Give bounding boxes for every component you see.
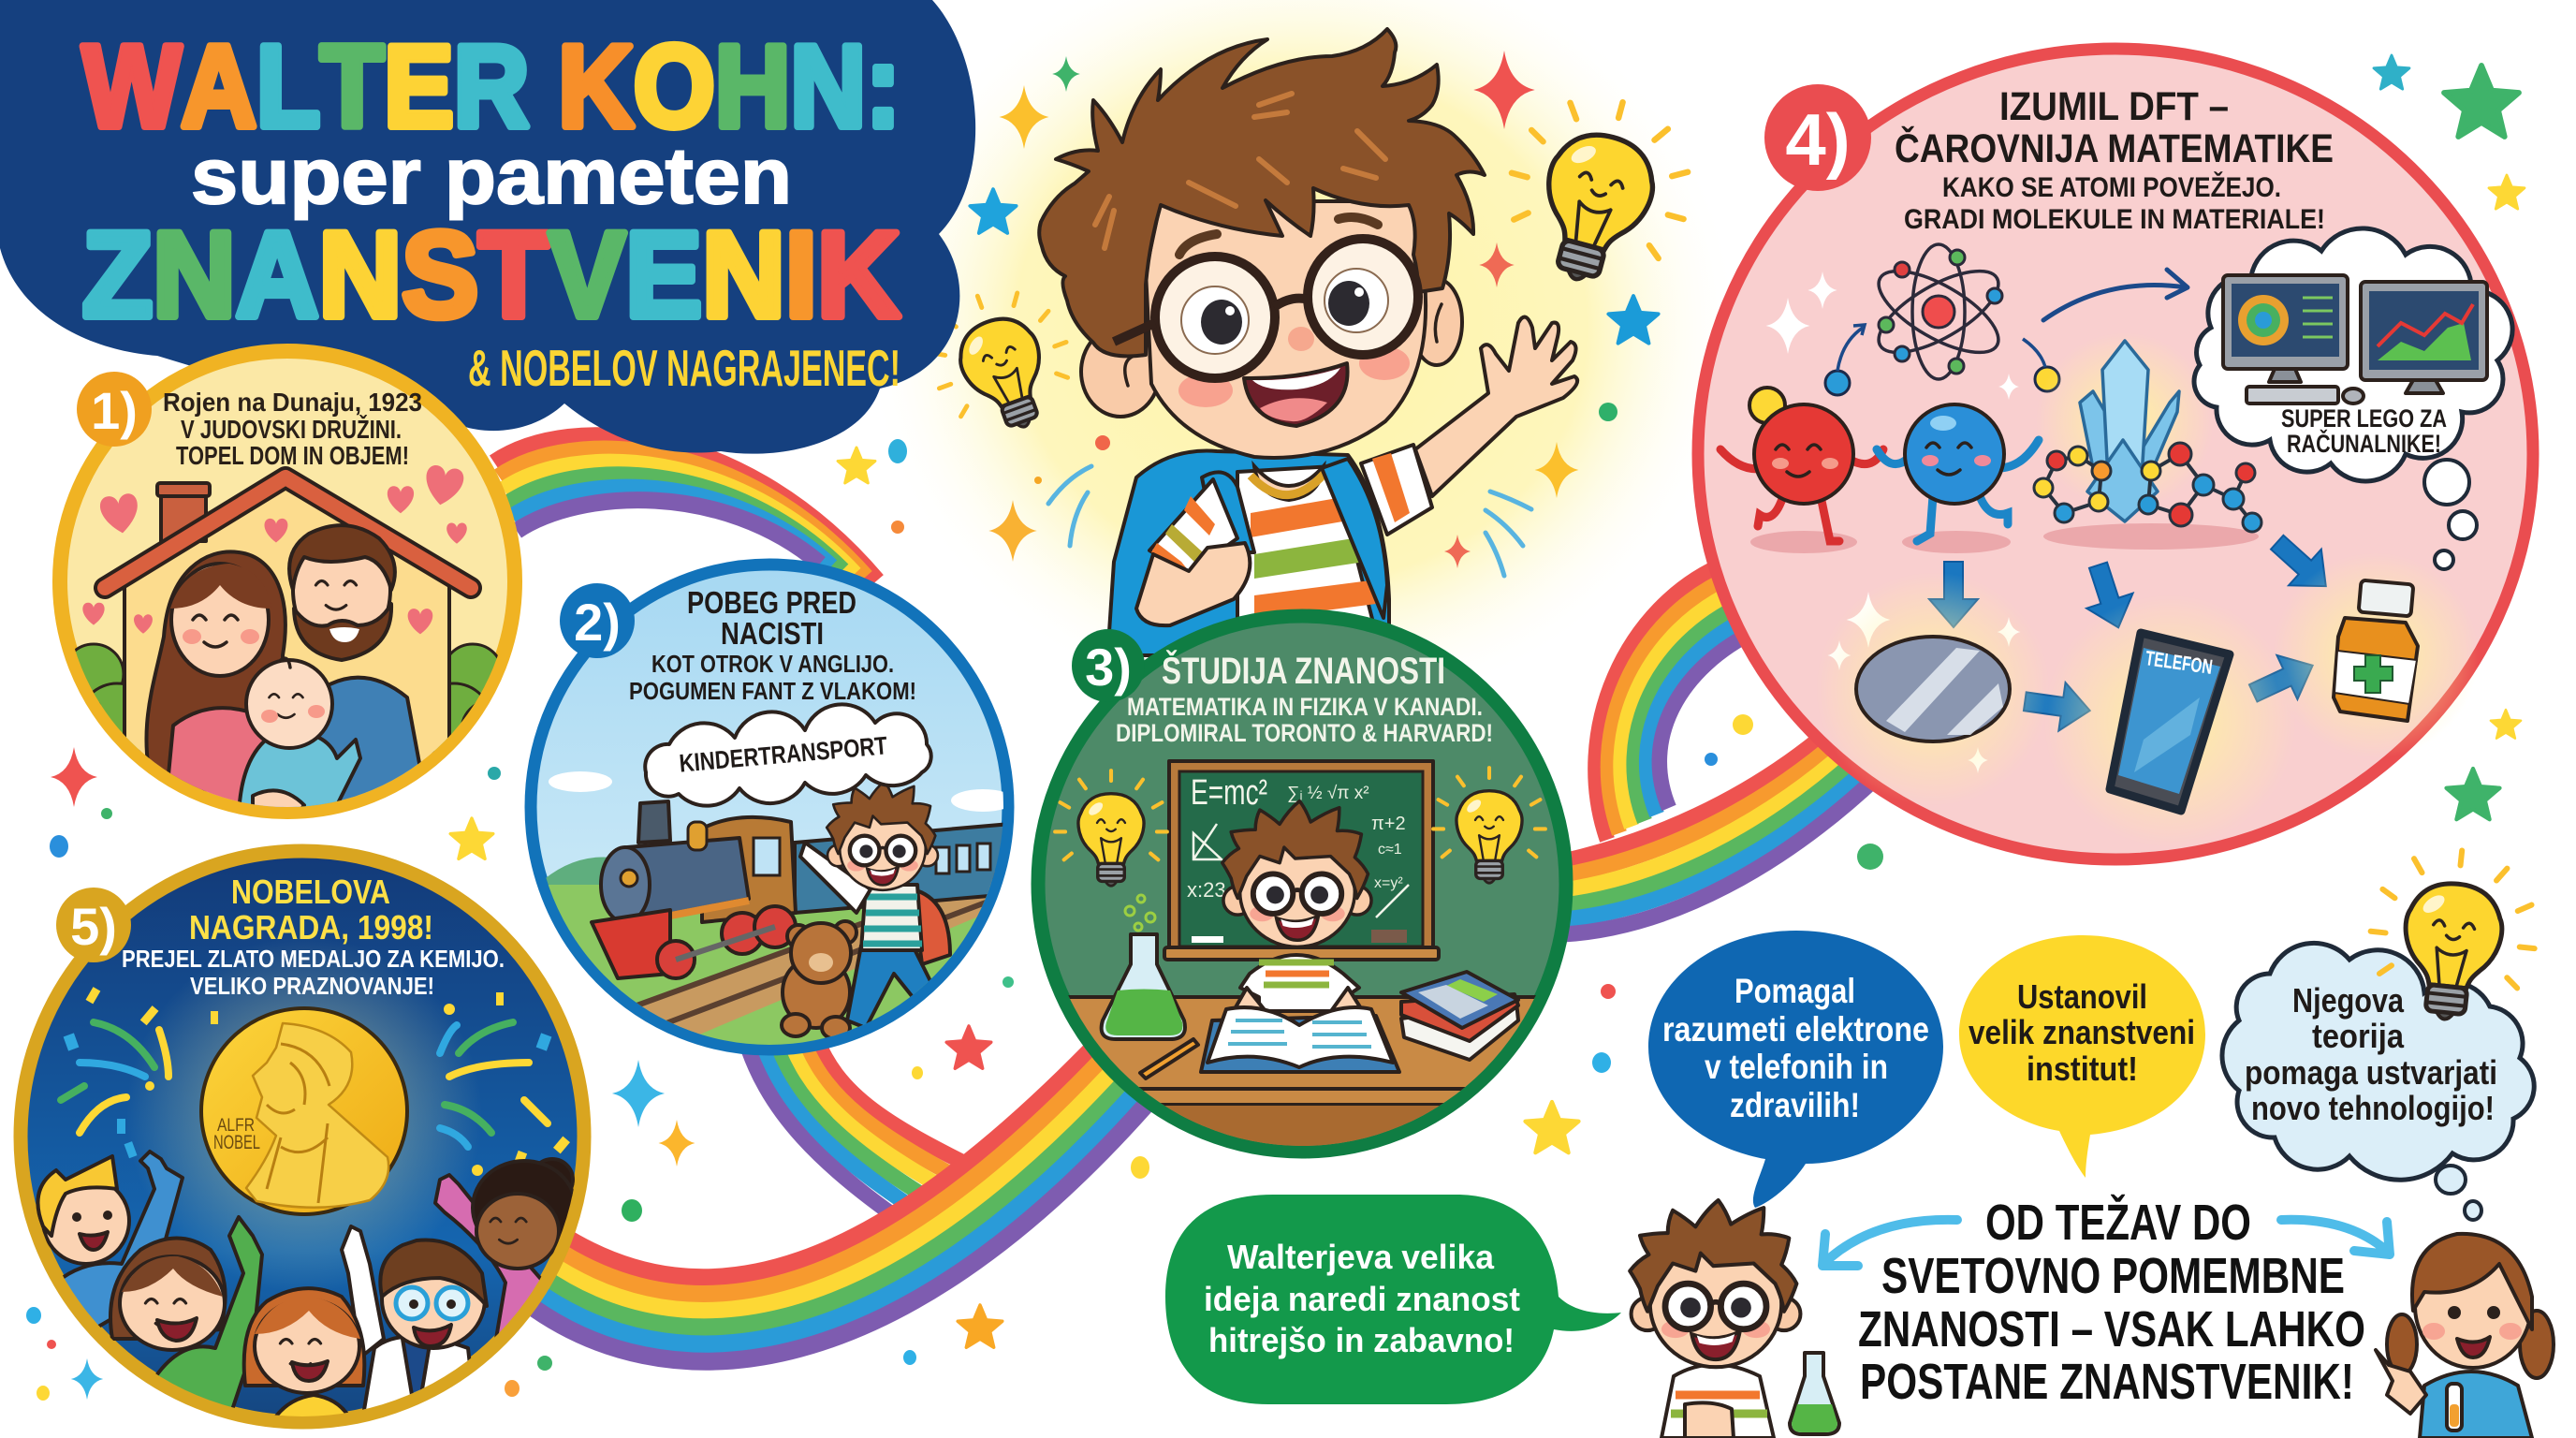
text block 4: ČAROVNIJA MATEMATIKE: [1895, 125, 2334, 171]
left monitor: [2223, 275, 2364, 404]
speech bubble: blue: zdravilih!: [1730, 1086, 1860, 1124]
cloud: Kindertransport label: KINDERTRANSPORT: [678, 731, 889, 778]
icon: lightbulb left: [915, 273, 1089, 449]
pencil: [1140, 1039, 1198, 1078]
rainbow: study to panel 4: [1563, 730, 1877, 934]
text block 4: KAKO SE ATOMI POVEŽEJO.: [1942, 171, 2281, 203]
badge 4: 4): [1785, 98, 1851, 181]
eyes: [1181, 286, 1249, 354]
text block 3: MATEMATIKA IN FIZIKA V KANADI.: [1127, 693, 1483, 721]
raised arm and waving hand: [1361, 317, 1577, 535]
title: super pameten: super pameten: [191, 132, 792, 220]
badge 1: [77, 372, 152, 447]
icon: silicon wafer: [1856, 637, 2010, 741]
illustration: medal and celebrating people: [37, 936, 576, 1432]
blackboard: ∑ᵢ ½ √π x²: [1287, 784, 1369, 803]
title: WALTER KOHN: WALTER KOHN:: [82, 22, 900, 151]
blue atom character: [1877, 404, 2039, 553]
speech bubble: green: [1165, 1195, 1621, 1404]
woman: [146, 551, 285, 805]
badge 4: [1764, 84, 1871, 191]
thought cloud: computers: [2194, 228, 2512, 569]
text block 1: [163, 388, 422, 470]
blackboard: x=y²: [1374, 875, 1403, 891]
closing message: SVETOVNO POMEMBNE: [1881, 1248, 2345, 1304]
badge 3: [1072, 629, 1145, 702]
wheels and cowcatcher: [592, 910, 670, 978]
illustration: family in front of house: [75, 466, 498, 807]
icon: backpack: [1108, 451, 1389, 655]
sparkles: [1766, 271, 2020, 773]
motion lines around boy: [1048, 466, 1531, 576]
speech bubble: yellow: [1959, 935, 2205, 1178]
icon: phone: TELEFON: [2144, 646, 2214, 679]
speech bubble: blue: razumeti elektrone: [1662, 1010, 1929, 1049]
text block 4: IZUMIL DFT –: [1999, 84, 2229, 129]
speech bubble: yellow: Ustanovil: [2017, 977, 2147, 1016]
badge 1: 1): [91, 381, 138, 440]
closing message: POSTANE ZNANSTVENIK!: [1860, 1354, 2354, 1410]
rainbow: escape to crossing: [742, 1030, 994, 1237]
panel 3: studying science: [1030, 616, 1573, 1166]
blackboard: π+2: [1371, 814, 1406, 834]
blackboard: [1164, 761, 1439, 960]
arrow to computers: [2043, 270, 2188, 320]
badge 5: [56, 888, 131, 962]
lightbulbs: [1055, 770, 1167, 886]
rainbow: nobel to study: [527, 1040, 1155, 1361]
baby: [238, 736, 362, 807]
main character: boy with glasses and backpack: [1039, 29, 1577, 655]
speech bubble: green: hitrejšo in zabavno!: [1208, 1321, 1515, 1359]
text block 4: [1895, 84, 2334, 235]
calculator and books: [1401, 972, 1518, 1060]
medal: NOBEL: [213, 1132, 260, 1153]
speech bubble: yellow: velik znanstveni: [1969, 1013, 2195, 1051]
speech bubble: yellow: institut!: [2027, 1049, 2138, 1088]
brown-haired girl: [110, 1217, 262, 1432]
badge 2: 2): [574, 593, 621, 652]
text block 5: [122, 873, 505, 1000]
panel: title cloud: [0, 0, 975, 454]
text block 5: NAGRADA, 1998!: [189, 908, 433, 946]
boy with flask: [1630, 1200, 1839, 1438]
arrow: curved right: [2281, 1220, 2390, 1255]
crystal with molecule: [2034, 332, 2261, 550]
text block 2: KOT OTROK V ANGLIJO.: [651, 650, 894, 678]
text block 2: [629, 585, 916, 705]
badge 2: [560, 583, 635, 658]
closing message: OD TEŽAV DO: [1985, 1194, 2251, 1251]
illustration: train, boy and teddy: [547, 771, 1003, 1045]
thought bubble: light blue: [2222, 943, 2534, 1220]
text block 1: V JUDOVSKI DRUŽINI.: [181, 415, 402, 444]
text block 5: VELIKO PRAZNOVANJE!: [190, 972, 434, 1000]
icon: lightbulb right: [1489, 80, 1708, 302]
glasses: [1155, 257, 1275, 378]
text block 3: [1116, 649, 1493, 747]
thought bubble: light blue: Njegova: [2292, 981, 2405, 1020]
text block 4: GRADI MOLEKULE IN MATERIALE!: [1904, 204, 2325, 235]
icon: phone: [2110, 633, 2230, 811]
blackboard: c≈1: [1378, 842, 1402, 858]
glows: [1816, 552, 2479, 847]
icon: atom: [1867, 244, 2010, 379]
cloud text: RAČUNALNIKE!: [2287, 429, 2441, 458]
speech bubble: blue: v telefonih in: [1705, 1048, 1888, 1086]
blue arrows: [1929, 524, 2342, 735]
confetti: [61, 1022, 548, 1147]
lightbulb right: [1433, 768, 1545, 883]
cloud text: [2281, 404, 2447, 458]
left strap and arm: [1136, 472, 1254, 625]
icon: medicine bottle: [2334, 580, 2418, 721]
text block 2: POBEG PRED: [687, 585, 856, 620]
closing message: [1858, 1194, 2365, 1410]
medal: ALFR: [217, 1116, 255, 1136]
ginger girl: [244, 1288, 364, 1432]
panel 4: DFT invention: [1698, 49, 2533, 859]
text block 3: DIPLOMIRAL TORONTO & HARVARD!: [1116, 719, 1493, 747]
illustration: classroom: [1053, 759, 1547, 1146]
text block 5: NOBELOVA: [231, 873, 390, 911]
thought bubble: light blue: teorija: [2312, 1017, 2405, 1055]
speech bubble: green: ideja naredi znanost: [1204, 1280, 1520, 1318]
cab: [702, 817, 796, 922]
panel 2: escape from nazis: [524, 565, 1020, 1063]
title: ZNANSTVENIK: ZNANSTVENIK: [82, 207, 900, 343]
flask: [1102, 895, 1185, 1039]
man: [294, 676, 421, 807]
hearts: [82, 463, 467, 634]
subtitle: & NOBELOV NAGRAJENEC!: [468, 339, 900, 397]
blond boy: [37, 1152, 183, 1329]
text block 1: TOPEL DOM IN OBJEM!: [176, 441, 409, 470]
text block 3: ŠTUDIJA ZNANOSTI: [1162, 649, 1445, 692]
medal: [201, 1008, 407, 1214]
small arrows around atom: [1825, 325, 2059, 395]
text block 5: PREJEL ZLATO MEDALJO ZA KEMIJO.: [122, 945, 505, 973]
teddy bear: [782, 921, 856, 1039]
rainbow: birth to escape: [494, 435, 877, 580]
dark-haired girl right: [433, 1157, 575, 1338]
text block 2: NACISTI: [721, 616, 824, 651]
closing message: ZNANOSTI – VSAK LAHKO: [1858, 1301, 2365, 1357]
rainbow: upper loop to panel 4: [1595, 564, 1757, 840]
text block 2: POGUMEN FANT Z VLAKOM!: [629, 677, 916, 705]
red atom character: [1720, 388, 1883, 553]
open book: [1201, 1007, 1399, 1072]
blackboard: x:23: [1187, 878, 1226, 902]
head: [1039, 29, 1485, 458]
badge 3: 3): [1085, 638, 1132, 697]
badge 5: 5): [70, 897, 117, 956]
speech bubble: blue: Pomagal: [1734, 972, 1855, 1010]
boy studying: [1222, 801, 1371, 1034]
girl with test tube: [2376, 1234, 2554, 1438]
carriage: [795, 824, 1011, 913]
boiler: [626, 836, 751, 912]
shirt with stripes: [1237, 459, 1387, 655]
arrow: curved left: [1822, 1220, 1957, 1266]
panel 5: Nobel prize: [21, 851, 584, 1432]
icon: lightbulb on thought bubble: [2363, 842, 2544, 1028]
panel 1: birth in Vienna: [52, 351, 521, 824]
right monitor: [2361, 282, 2487, 393]
mouth: [1244, 363, 1348, 426]
scientist: [342, 1226, 487, 1432]
text block 1: Rojen na Dunaju, 1923: [163, 388, 422, 417]
page background glow behind main character: [861, 0, 1741, 721]
speech bubble: green: Walterjeva velika: [1227, 1238, 1495, 1276]
cloud text: SUPER LEGO ZA: [2281, 404, 2447, 433]
cloud: Kindertransport label: [645, 704, 931, 806]
thought bubble: light blue: novo tehnologijo!: [2251, 1089, 2495, 1127]
boy body: [847, 946, 936, 1028]
speech bubble: blue: [1648, 931, 1943, 1208]
blackboard: E=mc²: [1191, 773, 1267, 813]
thought bubble: light blue: pomaga ustvarjati: [2245, 1053, 2497, 1092]
